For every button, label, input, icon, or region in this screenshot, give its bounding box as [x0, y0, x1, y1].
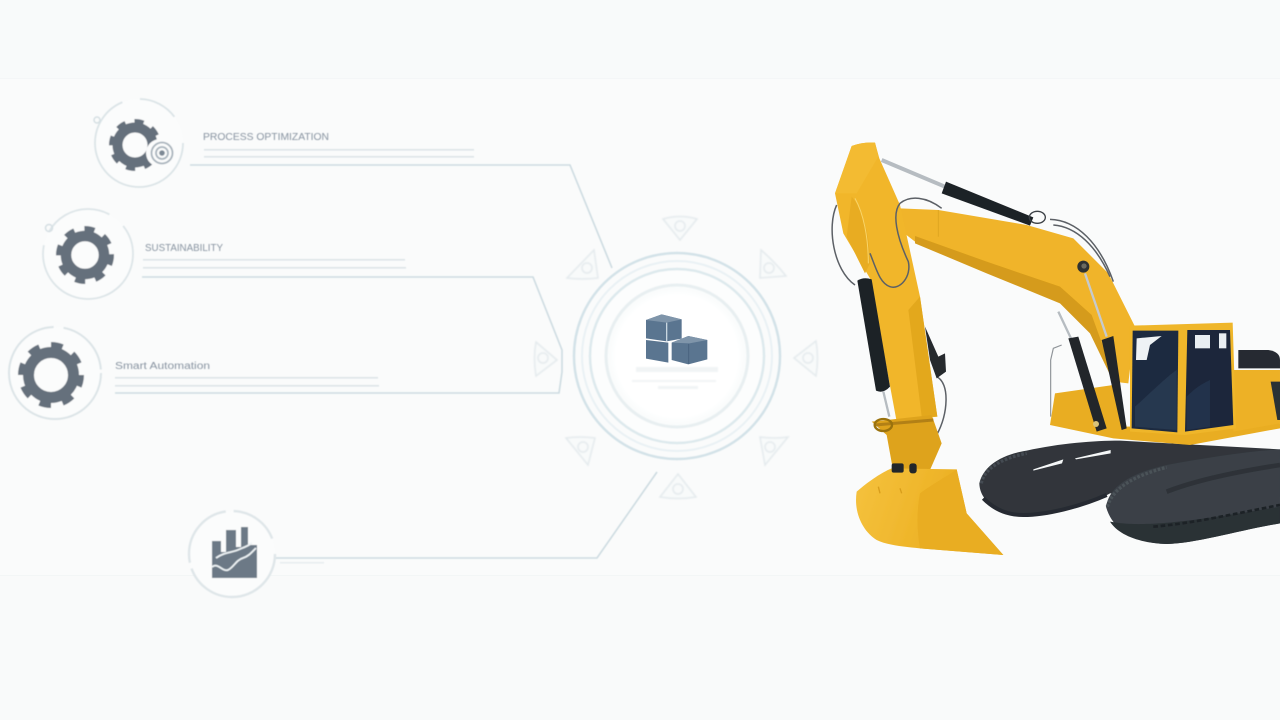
boom [900, 208, 1135, 383]
hub caption text [632, 367, 718, 389]
cube bottom left [646, 340, 668, 363]
node 3 heading: Smart Automation [115, 361, 210, 372]
cube top [646, 314, 682, 341]
node 1 gear icon [112, 122, 158, 168]
cab window left [1132, 331, 1178, 432]
node 1 target icon [146, 139, 174, 167]
arm cylinder [882, 160, 1045, 226]
boom cylinder, front [1077, 261, 1127, 430]
front crawler track [1106, 449, 1280, 544]
bucket [856, 468, 1003, 555]
node 4: chart icon [189, 511, 324, 597]
stick arm [835, 142, 937, 422]
orbit icon lower right [760, 437, 788, 465]
orbit icon lower left [566, 437, 595, 465]
node 3 gear icon [22, 346, 80, 404]
hub: concentric circles [574, 253, 780, 459]
bucket pins [892, 463, 917, 473]
orbit icon upper right [760, 250, 786, 278]
node 1 text lines [204, 149, 474, 158]
cab window right [1185, 330, 1233, 432]
node 1: gear with target [94, 99, 183, 187]
node 4 bars and trend icon [212, 527, 257, 578]
node 3 ring [9, 327, 101, 419]
upper body deck [1050, 350, 1280, 445]
node 2 gear icon [60, 230, 110, 280]
orbit icon upper left [567, 250, 598, 279]
node 2 text lines [143, 259, 406, 269]
node 2: gear [43, 209, 133, 299]
boom cylinder, rear [1051, 312, 1107, 432]
node 3: gear [9, 327, 101, 419]
orbit icon left [534, 342, 557, 376]
node 2 heading: SUSTAINABILITY [145, 243, 223, 254]
orbit icons: faint triangles [534, 216, 818, 498]
node 2 ring [43, 209, 133, 299]
connector lines [115, 165, 657, 558]
orbit icon bottom [660, 474, 696, 498]
node 1 ring [94, 99, 183, 187]
node 4 ring [189, 511, 275, 597]
bucket linkage [872, 415, 942, 472]
rear crawler track [979, 441, 1280, 515]
node 1 heading: PROCESS OPTIMIZATION [203, 131, 329, 143]
node 4 text stub [280, 562, 324, 564]
hub icon: stacked cubes [646, 314, 707, 364]
hydraulic hoses [832, 198, 1113, 435]
orbit icon right [794, 341, 818, 376]
cab [1130, 323, 1236, 435]
node 3 text lines [115, 377, 379, 387]
excavator illustration [832, 142, 1280, 555]
cube bottom right [672, 336, 707, 364]
bucket cylinder [857, 278, 946, 417]
orbit icon top [663, 216, 697, 240]
